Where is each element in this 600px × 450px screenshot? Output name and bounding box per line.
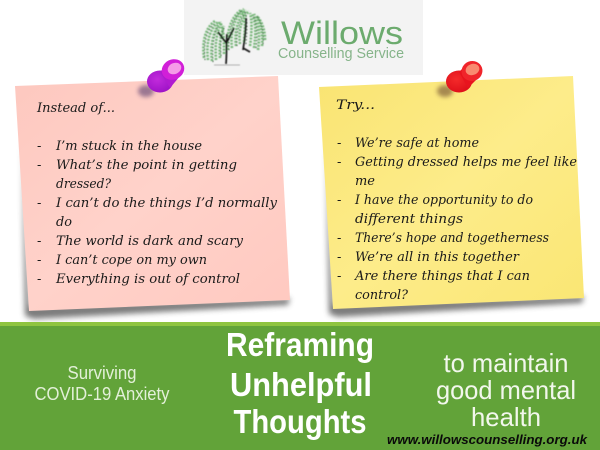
heading: try: Try... — [336, 98, 375, 113]
list: unhelpful thoughts: - — [37, 234, 41, 249]
list: unhelpful thoughts: do — [56, 215, 72, 230]
text: surviving covid-19 anxiety — [34, 363, 170, 404]
list: unhelpful thoughts: I can’t do the things I’d normally — [55, 196, 278, 211]
logo subtitle: Counselling Service — [278, 46, 404, 62]
text: to maintain good mental health: good mental — [436, 375, 576, 405]
list: helpful thoughts: - — [337, 269, 341, 284]
text: to maintain good mental health: to maintain — [444, 348, 568, 378]
list: unhelpful thoughts: I’m stuck in the house — [55, 139, 202, 154]
list: helpful thoughts — [337, 136, 577, 303]
list: unhelpful thoughts: - — [37, 253, 41, 268]
list: unhelpful thoughts: - — [37, 272, 41, 287]
title: reframing unhelpful thoughts: Thoughts — [234, 403, 366, 440]
list: helpful thoughts: I have the opportunity to do — [354, 193, 533, 208]
logo wordmark: Willows — [281, 15, 403, 51]
list: helpful thoughts: Are there things that I can — [354, 269, 530, 284]
title: reframing unhelpful thoughts — [226, 326, 374, 440]
list: unhelpful thoughts: - — [37, 196, 41, 211]
text: to maintain good mental health — [436, 348, 576, 432]
icon: willow tree — [203, 9, 265, 65]
list: unhelpful thoughts: The world is dark and scary — [56, 234, 244, 249]
list: helpful thoughts: There’s hope and togetherness — [355, 231, 549, 246]
list: helpful thoughts: We’re all in this together — [355, 250, 520, 265]
list: unhelpful thoughts — [37, 139, 278, 287]
icon: purple push pin — [138, 56, 188, 97]
list: helpful thoughts: We’re safe at home — [355, 136, 479, 151]
list: helpful thoughts: - — [337, 155, 341, 170]
list: unhelpful thoughts: Everything is out of control — [55, 272, 240, 287]
list: helpful thoughts: - — [337, 250, 341, 265]
panel: instead of note — [15, 76, 290, 319]
list: helpful thoughts: me — [355, 174, 375, 189]
list: helpful thoughts: Getting dressed helps me feel like — [355, 155, 577, 170]
website url: www.willowscounselling.org.uk — [387, 432, 588, 447]
list: helpful thoughts: control? — [355, 288, 409, 303]
text: to maintain good mental health: health — [471, 402, 541, 432]
list: helpful thoughts: - — [337, 136, 341, 151]
list: helpful thoughts: different things — [355, 212, 463, 227]
title: reframing unhelpful thoughts: Unhelpful — [230, 366, 372, 403]
list: unhelpful thoughts: - — [37, 158, 41, 173]
footer band — [0, 322, 600, 450]
list: unhelpful thoughts: I can’t cope on my own — [55, 253, 207, 268]
list: helpful thoughts: - — [337, 231, 341, 246]
list: unhelpful thoughts: What’s the point in getting — [56, 158, 237, 173]
list: helpful thoughts: - — [337, 193, 341, 208]
text: surviving covid-19 anxiety: COVID-19 Anxiety — [34, 384, 170, 404]
heading: instead of: Instead of... — [36, 101, 115, 116]
list: unhelpful thoughts: dressed? — [56, 177, 112, 192]
title: reframing unhelpful thoughts: Reframing — [226, 326, 374, 363]
logo panel — [184, 0, 423, 75]
panel: try note — [319, 76, 584, 317]
list: unhelpful thoughts: - — [37, 139, 41, 154]
text: surviving covid-19 anxiety: Surviving — [68, 363, 136, 383]
icon: red push pin — [437, 58, 485, 97]
